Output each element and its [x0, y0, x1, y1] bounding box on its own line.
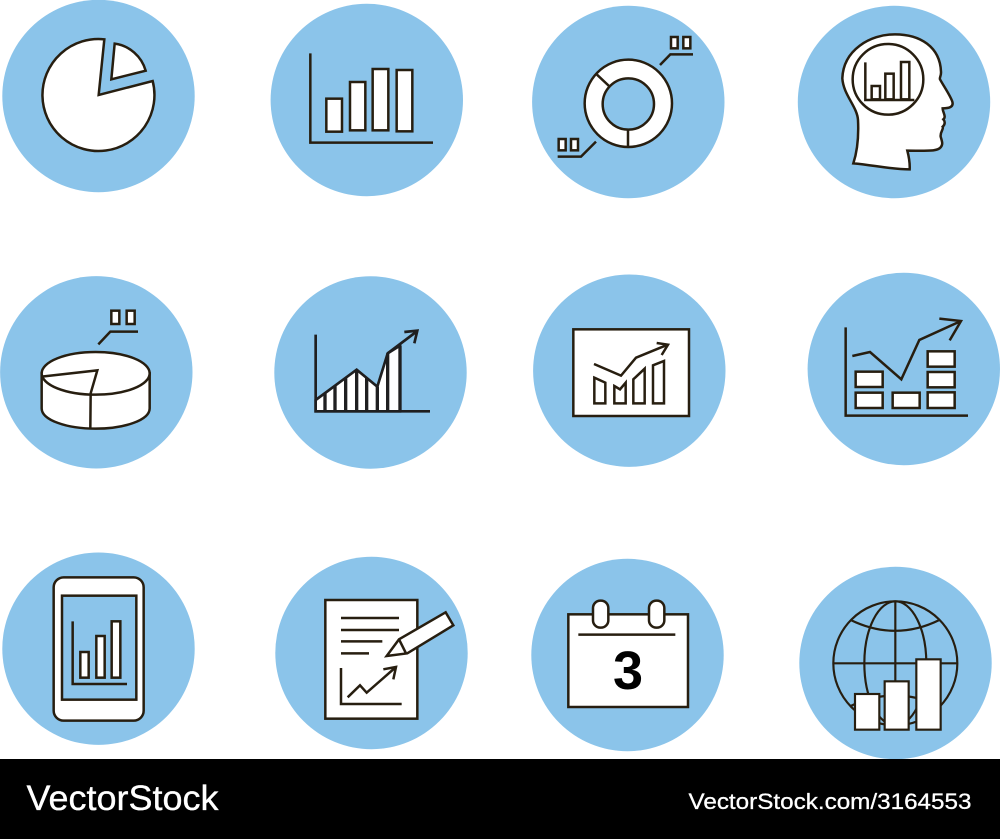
- footer image id: VectorStock.com/3164553: [688, 789, 972, 814]
- icon: smartphone with bar chart: [2, 552, 195, 745]
- icon: pie chart with slice: [2, 0, 195, 192]
- calendar number: 3: [613, 641, 643, 701]
- icon: head with bar chart: [798, 6, 990, 198]
- icon: presentation board with chart: [533, 274, 726, 467]
- icon: stacked blocks chart with arrow: [808, 273, 1000, 465]
- icon: striped area chart with arrow: [274, 276, 467, 469]
- footer bar: [0, 759, 1000, 839]
- footer logo text: VectorStock: [26, 779, 219, 818]
- icon: calendar with number 3: [531, 559, 724, 751]
- icon: document with chart and pencil: [275, 557, 468, 749]
- icon: donut chart with callouts: [532, 6, 724, 198]
- icon: globe with bar chart: [799, 567, 992, 759]
- icon: bar chart: [271, 4, 463, 196]
- icon: 3D pie chart: [0, 276, 192, 468]
